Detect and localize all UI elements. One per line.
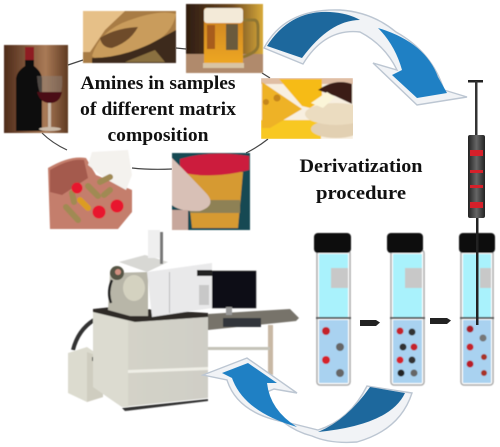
vial 3 — [459, 233, 495, 385]
chiller and hose — [68, 320, 103, 402]
mass spectrometer and GC — [108, 230, 212, 317]
photo: capsules in hand — [48, 150, 132, 229]
vial 1 — [314, 233, 351, 385]
heading: derivatization procedure: Derivatization — [300, 156, 423, 177]
photo: urine sample cup — [172, 153, 250, 230]
arrow: vial 1 to vial 2 — [360, 320, 380, 326]
photo: cheese — [261, 78, 353, 139]
photo: wine bottle and glass — [4, 45, 68, 133]
sample ring connector — [42, 48, 270, 169]
photo: beer mug — [186, 4, 263, 73]
title: amines in samples: Amines in samples — [80, 73, 236, 94]
instrument: GC-MS system — [68, 230, 299, 411]
vial 2 — [387, 233, 425, 385]
icon: syringe — [468, 80, 485, 218]
monitor and desk — [208, 271, 299, 375]
syringe needle — [476, 218, 478, 325]
title: amines in samples: composition — [108, 125, 209, 146]
title: amines in samples: of different matrix — [80, 99, 237, 120]
photo: fish — [83, 11, 176, 63]
arrow: curved blue arrow from samples to derivatization — [264, 10, 467, 105]
title: amines in samples — [80, 73, 237, 146]
arrow: curved blue arrow from vials to instrument — [203, 358, 412, 442]
heading: derivatization procedure: procedure — [316, 183, 406, 204]
heading: derivatization procedure — [300, 156, 423, 204]
arrow: vial 2 to vial 3 — [430, 318, 451, 324]
cabinet — [93, 307, 208, 411]
